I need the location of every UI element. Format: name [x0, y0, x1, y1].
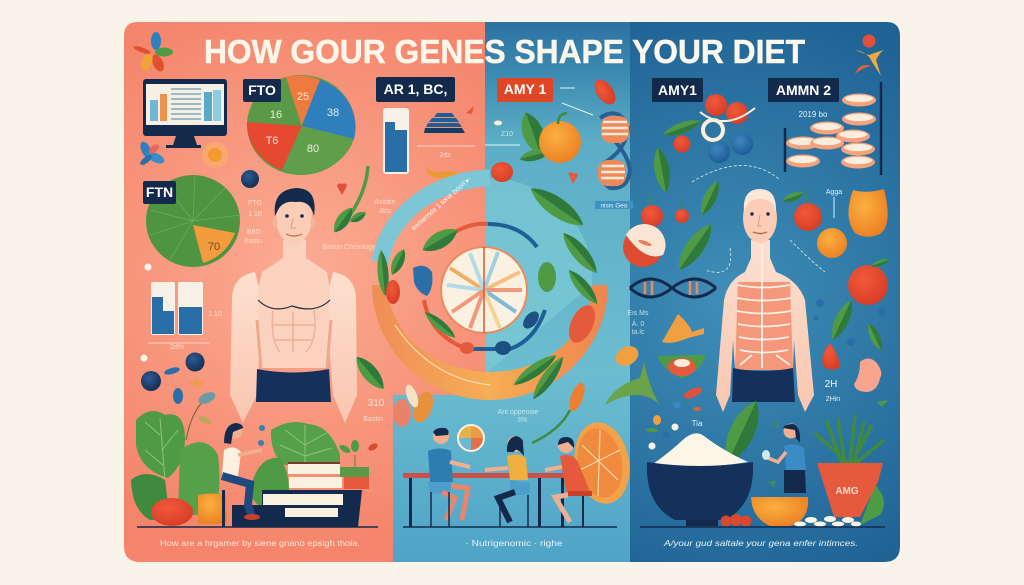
leaf near hip — [351, 352, 389, 394]
floor line right — [640, 526, 885, 528]
scene: table with three people — [403, 424, 617, 527]
note: Biston Chemlogy: Biston Chemlogy — [323, 244, 376, 251]
icon: halved orange — [568, 418, 636, 508]
dashed arcs — [692, 165, 825, 272]
note: Ant oppeosie — [498, 409, 539, 424]
caption middle: · Nutrigenomic · righe — [466, 538, 563, 548]
icon: floating dots — [258, 425, 265, 446]
icon: orange squash — [848, 189, 888, 237]
inner right teal half — [485, 178, 592, 374]
leaves on left of ring — [376, 223, 461, 341]
label: AMY 1 red — [497, 78, 553, 102]
note: Agga with arrow — [826, 189, 842, 218]
leaves and fruit left of second man — [641, 146, 724, 275]
icon: melon half — [751, 497, 808, 526]
small pot with sprout — [338, 440, 369, 489]
icon: blue blob left — [413, 266, 432, 296]
scale line with note under glasses: 2d% — [170, 344, 184, 351]
arrow: pointer to DNA — [560, 88, 593, 115]
small notes left of man: 1 10 — [248, 211, 262, 218]
figure: muscular man — [230, 188, 357, 423]
arms — [230, 272, 357, 423]
scale line with note under glasses — [148, 343, 210, 351]
stack of books — [263, 462, 343, 517]
label: AMY1 navy: AMY1 — [658, 82, 697, 98]
chart: two blue glasses — [151, 282, 203, 335]
note: Tia: Tia — [692, 419, 703, 428]
note: 310 Bastin: Bastin — [363, 416, 383, 423]
plant: aloe in orange pot — [815, 415, 884, 525]
icon: blueberry — [241, 170, 259, 188]
icon: red heart — [337, 183, 347, 195]
icon: halved apple — [623, 224, 666, 267]
icon: red apple — [848, 257, 890, 305]
icon: orange with leaves — [516, 109, 581, 164]
icon: red chili top — [590, 76, 620, 108]
label: AMMN 2: AMMN 2 — [776, 82, 831, 98]
note: 2H: 2H — [825, 379, 837, 390]
icon: green pod plant — [329, 166, 368, 236]
plant: lettuce right — [250, 422, 340, 510]
person: woman in yellow — [485, 436, 530, 527]
small notes left of man: Bastn — [244, 238, 262, 245]
title: HOW GOUR GENES SHAPE YOUR DIET — [204, 33, 805, 70]
note: 2019 bo: 2019 bo — [799, 110, 828, 119]
label: AR 1, BC: AR 1, BC, — [384, 81, 447, 97]
plant: aloe in orange pot: AMG — [835, 486, 859, 497]
icon: sun — [202, 142, 228, 168]
icon: orange pod — [426, 168, 458, 178]
plant: stem with blue leaf — [186, 390, 217, 440]
icon: white pellets — [794, 516, 861, 526]
icon: small red arrow — [466, 106, 474, 114]
person: man in blue — [428, 428, 470, 527]
small note Z10 — [485, 120, 520, 145]
pie chart: FTO: 25 — [297, 91, 309, 103]
note: Ant oppeosie: 3% — [517, 417, 527, 424]
small note below DNA — [628, 310, 649, 336]
icon: blue layered stack — [424, 113, 465, 133]
icon: tomatoes — [720, 514, 752, 526]
label: AMY 1 red: AMY 1 — [504, 81, 546, 97]
cycle arrows around wheel — [424, 224, 545, 349]
note: gene tag — [595, 201, 633, 210]
note: gene tag: nisis Geo — [600, 202, 628, 210]
navy base — [232, 490, 362, 527]
note: 2H: 2Hin — [826, 396, 840, 403]
orange outer ring — [372, 285, 608, 400]
pie chart: FTO — [247, 75, 356, 175]
icon: orange squash — [198, 494, 227, 524]
icon: bowl of rice — [647, 433, 753, 526]
icon: red connector — [460, 342, 474, 354]
right side accents — [814, 297, 888, 407]
icon: white dot — [144, 264, 152, 270]
teal arc with text — [380, 176, 490, 262]
label: FTO — [243, 79, 281, 102]
icon: blue blob right — [520, 308, 542, 332]
chart: radial gene wheel — [441, 247, 527, 333]
small notes left of man: B6G — [247, 229, 261, 236]
scale line with note — [417, 146, 475, 159]
note: Ant oppeosie: Ant oppeosie — [498, 409, 539, 416]
leaves and fruit at right of ring — [491, 162, 602, 403]
figure: woman in blue — [762, 421, 806, 493]
pie chart: FTO: 16 — [270, 109, 282, 121]
pie chart: FTO: 80 — [307, 143, 319, 155]
autumn leaves — [393, 383, 437, 427]
chart: stacked discs — [785, 82, 881, 175]
icon: leaf behind rice — [717, 396, 767, 468]
small note Z10: Z10 — [501, 131, 513, 138]
scattered food pieces lower centre — [605, 314, 706, 450]
label: AR 1, BC — [376, 77, 455, 102]
icon: tomato — [151, 498, 193, 526]
icon: scattered berries — [140, 352, 205, 404]
torso — [258, 240, 330, 368]
pie chart: leaf: 70 — [208, 241, 220, 253]
icon: orange fruit — [817, 228, 847, 258]
figure: man with exposed muscles — [716, 189, 814, 412]
small note right of glasses: 1 10 — [208, 311, 222, 318]
pie chart: FTO: 38 — [327, 107, 339, 119]
small note below DNA: Á. 0 — [632, 319, 644, 328]
small notes beside pod — [374, 199, 396, 215]
note: 310 Bastin: 310 — [368, 398, 385, 409]
label: AMMN 2 — [768, 78, 839, 102]
pie chart: leaf — [146, 175, 240, 267]
plant: lettuce left — [131, 411, 219, 520]
small notes beside pod: Asiden — [374, 199, 396, 206]
icon: blue blob bottom — [495, 341, 511, 355]
note: Agga with arrow: Agga — [826, 189, 842, 196]
label: FTO: FTO — [248, 82, 276, 98]
caption right: A/your gud saltale your gena enfer intimces. — [663, 538, 858, 548]
label: FTN: FTN — [146, 184, 173, 200]
small notes left of man: FTG — [248, 200, 262, 207]
icon: red pod — [367, 442, 379, 452]
note: 2H — [825, 379, 840, 403]
note: 310 Bastin — [363, 398, 385, 423]
small notes beside pod: illits — [379, 208, 391, 215]
woman — [222, 423, 262, 527]
chili on stem — [532, 381, 588, 443]
small notes left of man — [244, 200, 262, 245]
icon: top right figure logo — [855, 34, 884, 76]
icon: red heart small — [568, 172, 578, 184]
scene: woman with plants and books — [131, 390, 379, 527]
person: woman in orange — [545, 437, 592, 527]
icon: tomato with leaf — [781, 189, 822, 231]
panel: teal middle panel — [393, 22, 632, 562]
icon: DNA helix — [598, 113, 630, 188]
pie chart: FTO: T6 — [266, 135, 278, 147]
icon: small blue butterfly — [138, 140, 166, 167]
small note below DNA: ta.lc — [632, 329, 645, 336]
scale line with note: 2ds — [439, 152, 451, 159]
label: FTN — [143, 181, 176, 204]
panel: salmon left panel — [124, 22, 485, 562]
caption left: How are a hrgamer by siene gnano epsigh thoia. — [160, 538, 360, 548]
chart: blue glass — [383, 108, 409, 174]
icon: horizontal DNA — [630, 279, 716, 297]
icon: computer monitor with charts — [143, 79, 227, 148]
icon: flower logo top left — [133, 32, 173, 73]
icon: gene wheel badge — [457, 424, 485, 452]
icon: fruit and ring cluster — [661, 94, 755, 163]
panel: blue right panel — [630, 22, 900, 562]
label: AMY1 navy — [652, 78, 703, 102]
small note below DNA: Eis Ms — [628, 310, 649, 317]
teal arc with text: Immernos 1 tone boori ▸ — [411, 176, 472, 232]
